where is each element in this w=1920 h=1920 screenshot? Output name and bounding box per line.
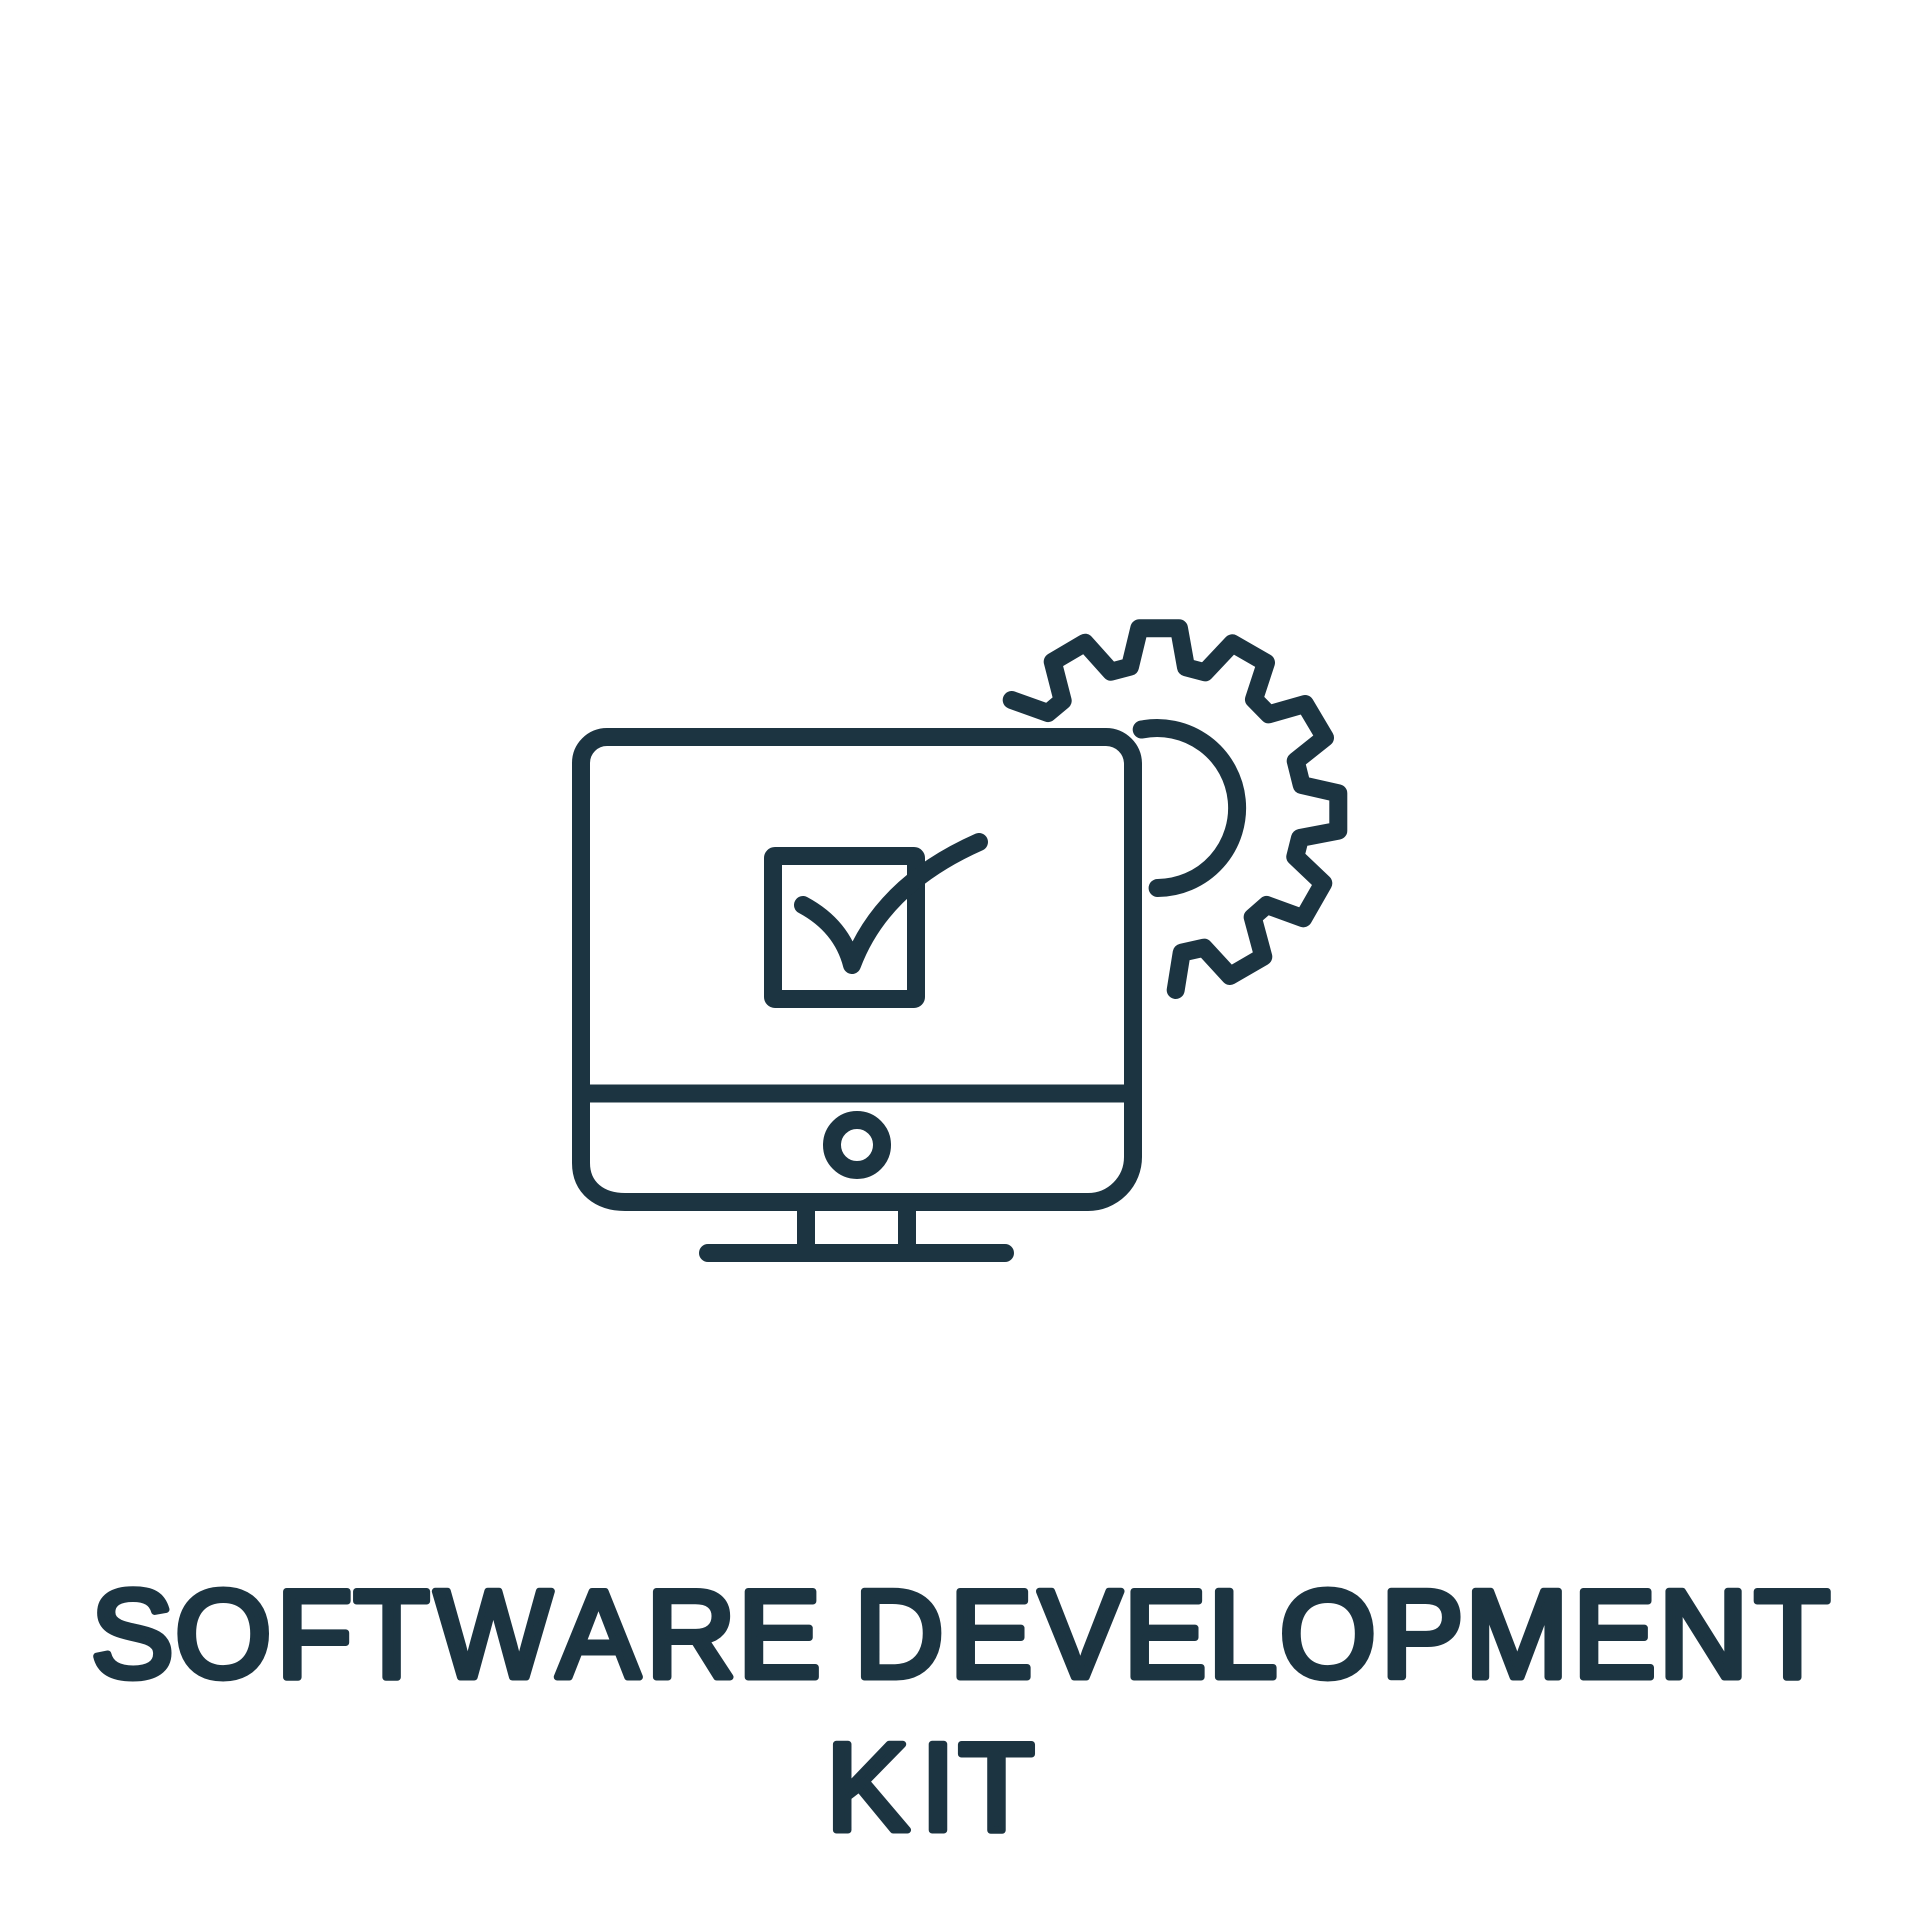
icon: software development kit (581, 628, 1338, 1253)
icon: monitor screen divider (581, 1084, 1133, 1102)
title: SOFTWARE (91, 1566, 821, 1704)
icon: check mark (803, 842, 979, 965)
icon: monitor power button (832, 1120, 882, 1170)
title: DEVELOPMENT (854, 1566, 1830, 1704)
title: KIT (826, 1719, 1034, 1857)
icon: gear inner arc (1142, 728, 1237, 888)
icon: checkbox (773, 856, 916, 999)
icon: monitor stand (708, 1202, 1005, 1253)
icon: gear outline (1012, 628, 1338, 990)
icon: monitor body (581, 737, 1133, 1202)
